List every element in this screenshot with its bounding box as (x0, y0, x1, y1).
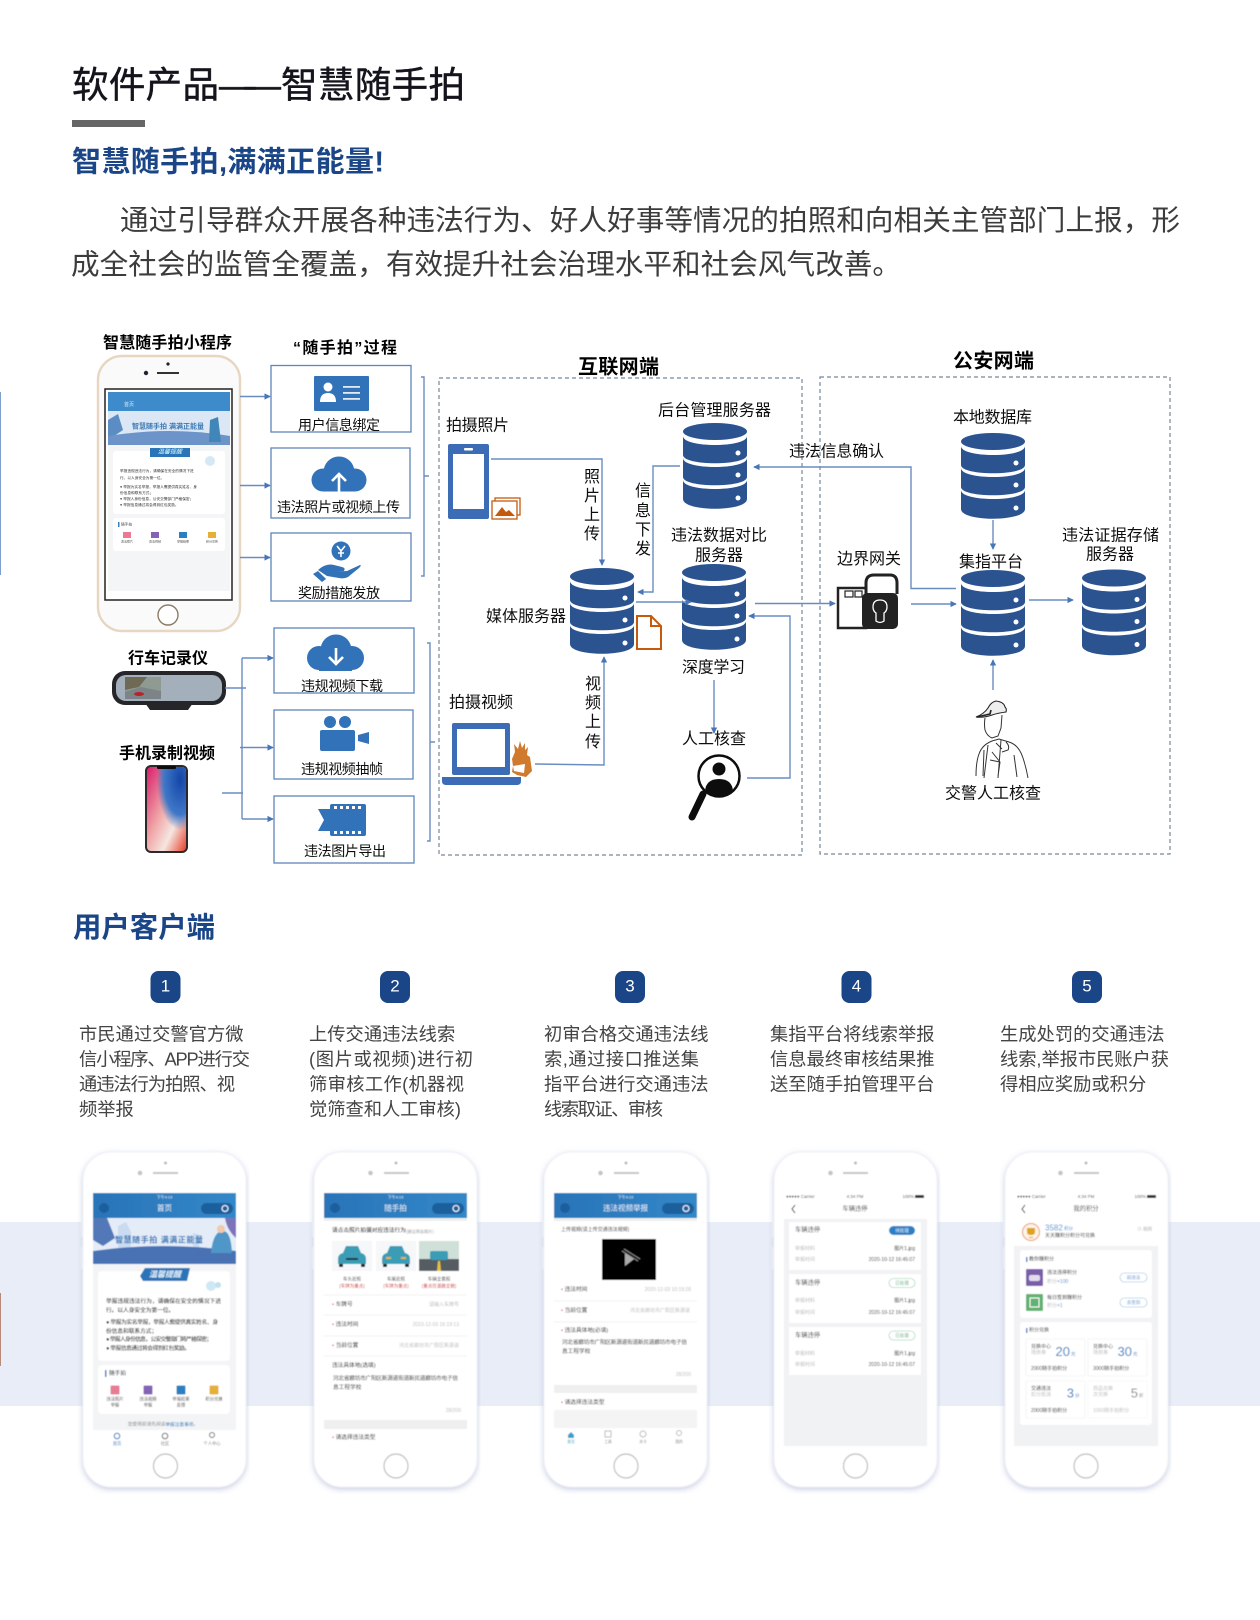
arrow: info dispatch: 息 (635, 502, 651, 520)
phone 5: points: ⊙ 规则 (1137, 1226, 1153, 1232)
gold phone with mini program: 份信息和联系方式； (120, 490, 153, 495)
step 1: 信小程序、APP进行交 (79, 1048, 250, 1070)
phone 1: home: 举报 (111, 1402, 120, 1408)
phone 5: points: 3000随手拍积分 (1093, 1365, 1129, 1372)
bracket: lower group (427, 643, 435, 841)
step 2: (图片或视频)进行初 (309, 1048, 473, 1070)
phone 3: report video: 我的 (675, 1439, 683, 1444)
phone 3: report video: • 违法时间 (561, 1285, 588, 1293)
phone 2: report photo: (车牌为重点) (383, 1282, 409, 1290)
phone 4: violation list: 车辆违停 (795, 1224, 820, 1234)
phone 1: home: 首页 (157, 1202, 172, 1212)
dash cam: 行车记录仪 (128, 648, 208, 668)
step 1: 1 (161, 976, 170, 996)
manual review (682, 730, 746, 817)
database: local (953, 408, 1032, 519)
database: backend server: 后台管理服务器 (658, 402, 771, 420)
phone 1: home: 举报违规违法行为，请确保在安全的情况下进 (106, 1297, 221, 1305)
step 4: 4 (852, 976, 861, 996)
step: frame extraction (274, 710, 413, 779)
phone 2: report photo (312, 1152, 477, 1487)
database: backend server (658, 402, 771, 509)
arrows: phone to steps (240, 396, 270, 558)
step 5 (1000, 971, 1169, 1094)
arrow: violation confirmation: 违法信息确认 (789, 442, 884, 460)
phone 5: points: 分 (1075, 1392, 1080, 1399)
phone 4: violation list: 图片1.jpg (894, 1350, 915, 1357)
phone 1: home: 行。以人身安全为第一位。 (106, 1306, 174, 1314)
phone 5: points (1003, 1152, 1168, 1487)
icon: document (637, 616, 661, 649)
phone 5: points: 场房券 (1031, 1349, 1046, 1356)
phone 4: violation list: 2020-10-12 16:45:07 (869, 1257, 915, 1263)
gold phone with mini program: 温馨提醒 (158, 448, 183, 456)
phone 4: violation list: 待处理 (895, 1227, 909, 1234)
phone 5: points: 前违法 (1127, 1274, 1141, 1281)
intro paragraph (71, 205, 1180, 281)
gold phone with mini program: ● 举报人身份信息，公安交警部门严格保密； (120, 496, 193, 501)
phone 3: report video: 上传视频(请上传交通违法视频) (561, 1226, 630, 1233)
step: reward (271, 533, 411, 601)
step 3: 索,通过接口推送集 (544, 1048, 699, 1070)
arrow: local to platform (992, 520, 994, 549)
phone 5: points: 元 (1071, 1352, 1076, 1358)
database: compare server: 违法数据对比 (671, 526, 767, 544)
phone 2: report photo: (车牌为重点) (339, 1282, 365, 1290)
gold phone with mini program: 举报结果 (177, 538, 189, 544)
phone 5: points: 次兑换 (1093, 1391, 1108, 1398)
capture video: 拍摄视频 (449, 694, 513, 712)
phone 1: home: 积分兑换 (205, 1396, 223, 1402)
phone 5: points: 兑换中心 (1093, 1343, 1113, 1350)
phone 4: violation list: 举报材料 (795, 1245, 815, 1252)
phone 4: violation list: 已处理 (895, 1332, 909, 1339)
left edge sliver (0, 392, 1, 1366)
database: platform: 集指平台 (959, 553, 1023, 571)
dash cam (112, 648, 226, 710)
heading: user client: 用户客户端 (73, 912, 215, 944)
arrow: photo upload: 传 (584, 524, 600, 542)
gold phone with mini program: 智慧随手拍 满满正能量 (132, 422, 204, 430)
phone 2: report photo: 河北省廊坊市广阳区新源道街道新民道廊坊市电子信 (333, 1374, 458, 1382)
phone 2: report photo: 请输入车牌号 (429, 1301, 459, 1308)
phone 5: points: ●●●●● Carrier (1017, 1194, 1046, 1199)
phone 5: points: 100% (1134, 1194, 1146, 1199)
arrow: photo upload (491, 459, 602, 565)
step: frame extraction: 违规视频抽帧 (301, 761, 383, 777)
gold phone with mini program: 违法照片 (121, 538, 133, 544)
gold phone with mini program: 违法视频 (149, 538, 161, 544)
gold phone with mini program: 举报违规违法行为，请确保在安全的情况下进 (120, 468, 194, 473)
phone 4: violation list: 已处理 (895, 1280, 909, 1286)
phone 2: report photo: 违法具体地(选填) (332, 1361, 376, 1369)
phone 1: home (81, 1152, 246, 1487)
step 2 (309, 971, 473, 1120)
phone 5: points: 折 (1139, 1392, 1144, 1399)
phone 1: home: 个人中心 (203, 1440, 221, 1447)
gateway (837, 550, 901, 629)
database: compare server (671, 526, 767, 650)
phone 5: points: 20 (1056, 1344, 1070, 1359)
phone 3: report video: 28/200 (676, 1372, 691, 1378)
phone 4: violation list: 车辆违停 (842, 1204, 868, 1212)
database: compare server: 服务器 (695, 546, 743, 564)
phone 5: points: 场房券 (1093, 1349, 1108, 1356)
arrow: info dispatch: 发 (635, 540, 651, 558)
phone 5: points: 每日签到赚积分 (1047, 1294, 1082, 1301)
step 3: 3 (625, 976, 635, 996)
arrow: video upload: 视 (585, 674, 601, 692)
phone 1: home: 举报结果 (172, 1396, 190, 1402)
phone 5: points: 天天赚积分积分可兑换 (1045, 1232, 1095, 1239)
arrow: to manual review (713, 680, 715, 733)
step 2: 筛审核工作(机器视 (309, 1074, 464, 1094)
phone 2: report photo: 车头近照 (343, 1276, 361, 1282)
phone 5: points: 积分+100 (1047, 1278, 1068, 1285)
phone 5: points: 5 (1131, 1386, 1138, 1400)
arrow: info dispatch: 信 (635, 482, 651, 500)
heading: process: “随手拍”过程 (293, 338, 397, 357)
label: deep learning: 深度学习 (682, 658, 745, 676)
step 3: 线索取证、审核 (544, 1098, 663, 1120)
arrow: platform to evidence (1029, 599, 1073, 601)
phone 1: home: 社区 (161, 1440, 170, 1447)
database: evidence (1062, 526, 1159, 655)
arrow: gateway to platform (911, 603, 956, 605)
phone 1: home: 份信息和联系方式； (106, 1327, 157, 1335)
arrow: photo upload: 照 (584, 468, 600, 486)
phone 2: report photo: 随手拍 (384, 1202, 407, 1212)
heading: mini program: 智慧随手拍小程序 (103, 333, 232, 352)
phone 1: home: 智慧随手拍 满满正能量 (115, 1234, 203, 1244)
phone 5: points: 我的积分 (1073, 1204, 1099, 1212)
phone 4: violation list (772, 1152, 937, 1487)
capture photo (446, 416, 520, 519)
phone 2: report photo: • 请选择违法类型 (332, 1433, 376, 1441)
database: evidence: 违法证据存储 (1062, 526, 1159, 544)
phone 5: points: 3582 积分 (1045, 1224, 1074, 1232)
phone 2: report photo: 下午4:19 (388, 1194, 404, 1200)
phone 3: report video: 违法视频举报 (603, 1202, 648, 1212)
phone 1: home: 随手拍 (109, 1369, 126, 1377)
phone 2: report photo: • 当前位置 (332, 1341, 359, 1349)
arrow: media to compare (636, 601, 691, 603)
step 5: 生成处罚的交通违法 (1000, 1024, 1165, 1044)
phone 3: report video: 关卡 (639, 1439, 647, 1444)
background band behind phones (0, 1222, 1260, 1406)
phone 4: violation list: 举报时间 (795, 1361, 815, 1368)
phone 4: violation list: 图片1.jpg (894, 1297, 915, 1304)
gold phone with mini program: ● 举报信息通过将会得到红包奖励。 (120, 502, 179, 507)
phone 1: home: 举报 (144, 1402, 153, 1408)
phone 1: home: ● 举报信息通过将会得到红包奖励。 (106, 1344, 190, 1352)
phone 2: report photo: 车尾近照 (387, 1276, 405, 1282)
phone video (119, 744, 215, 853)
step 3: 初审合格交通违法线 (544, 1024, 709, 1044)
database: media server: 媒体服务器 (486, 608, 566, 626)
gateway: 边界网关 (837, 550, 901, 568)
step: upload: 违法照片或视频上传 (277, 499, 400, 515)
gold phone with mini program: ● 举报为实名举报，举报人需提供真实姓名、身 (120, 484, 197, 489)
database: local: 本地数据库 (953, 408, 1032, 426)
phone 4: violation list: 图片1.jpg (894, 1245, 915, 1252)
database: platform (959, 553, 1025, 656)
intro paragraph: 成全社会的监管全覆盖，有效提升社会治理水平和社会风气改善。 (71, 249, 901, 281)
phone 5: points: 教你赚积分 (1029, 1256, 1054, 1262)
phone 2: report photo: (重点在道路全貌) (422, 1282, 457, 1290)
phone 5: points: 交通违法 (1031, 1385, 1051, 1392)
phone 5: points: 2000随手拍积分 (1031, 1365, 1067, 1372)
phone 4: violation list: 2020-10-12 16:45:07 (869, 1310, 915, 1316)
phone 1: home: 首页 (113, 1440, 122, 1447)
step 1: 通违法行为拍照、视 (79, 1074, 235, 1094)
phone 4: violation list: 举报时间 (795, 1256, 815, 1263)
phone 3: report video: 工具 (604, 1439, 612, 1444)
arrow: video upload (535, 657, 604, 765)
arrow: photo upload: 片 (584, 486, 600, 504)
step 1: 市民通过交警官方微 (79, 1024, 244, 1044)
arrow: video upload: 频 (585, 694, 601, 712)
phone 5: points: 商品兑换 (1093, 1385, 1113, 1392)
step: video download (274, 628, 414, 694)
arrow: violation confirmation (754, 442, 956, 588)
phone 5: points: 兑换中心 (1031, 1343, 1051, 1350)
arrow: photo upload: 上 (584, 506, 600, 524)
panel: internet side (439, 378, 802, 855)
step 3: 指平台进行交通违法 (544, 1074, 709, 1094)
phone 3: report video: 息工程学校 (562, 1347, 591, 1355)
step: image export: 违法图片导出 (304, 843, 386, 859)
step: upload (271, 448, 410, 518)
gold phone with mini program: 首页 (124, 401, 134, 408)
gold phone with mini program: 行。以人身安全为第一位。 (120, 475, 164, 480)
heading: police side: 公安网端 (953, 350, 1034, 372)
step 1: 频举报 (79, 1098, 134, 1120)
phone 1: home: 违法视频 (139, 1396, 157, 1402)
phone 2: report photo: 车辆全景照 (428, 1276, 451, 1282)
arrow: review back to compare (747, 616, 790, 778)
phone 1: home: ● 举报人身份信息，公安交警部门将严格保密； (106, 1335, 212, 1343)
title underline (72, 120, 145, 127)
phone 4: violation list: 举报材料 (795, 1350, 815, 1357)
database: evidence: 服务器 (1086, 546, 1134, 564)
subtitle: 智慧随手拍,满满正能量! (72, 146, 384, 178)
capture photo: 拍摄照片 (446, 416, 509, 434)
title: 软件产品 (72, 64, 219, 106)
phone 1: home: 您使用前请先阅读举报注意事项。 (128, 1420, 198, 1428)
phone 5: points: 扣分抵消 (1031, 1391, 1051, 1398)
traffic police (976, 701, 1028, 778)
step 5: 5 (1082, 976, 1092, 996)
arrow: video upload: 传 (585, 732, 601, 750)
phone 4: violation list: 举报材料 (795, 1297, 815, 1304)
phone 1: home: 温馨提醒 (149, 1270, 183, 1279)
phone 2: report photo: 2023-12-03 16:19:13 (413, 1322, 459, 1328)
phone 1: home: ● 举报为实名举报，举报人需提供真实姓名、身 (106, 1318, 218, 1326)
phone 3: report video: 首页 (567, 1439, 575, 1444)
database: media server (486, 568, 634, 654)
arrow: video upload: 上 (585, 712, 601, 730)
phone 5: points: 1000随手拍积分 (1093, 1407, 1129, 1414)
phone 5: points: 积分兑换 (1029, 1326, 1049, 1334)
phone 3: report video: 下午4:19 (618, 1194, 634, 1200)
phone 1: home: 下午4:19 (157, 1194, 173, 1200)
phone 4: violation list: ●●●●● Carrier (786, 1194, 815, 1199)
step 3 (544, 971, 709, 1120)
label: traffic police review: 交警人工核查 (945, 784, 1041, 802)
step 4: 送至随手拍管理平台 (770, 1074, 935, 1094)
step 2: 2 (390, 976, 400, 996)
phone video: 手机录制视频 (119, 744, 215, 762)
arrow: compare to gateway (755, 602, 835, 604)
step 5: 线索,举报市民账户获 (1000, 1048, 1169, 1070)
phone 2: report photo: 河北省廊坊市广阳区新源道 (399, 1342, 459, 1349)
step 1 (79, 971, 250, 1120)
gold phone with mini program: 积分兑换 (206, 538, 218, 544)
heading: internet side: 互联网端 (578, 356, 659, 378)
step: reward: 奖励措施发放 (298, 585, 380, 601)
phone 4: violation list: 举报时间 (795, 1309, 815, 1316)
phone 3: report video (542, 1152, 707, 1487)
step 5: 得相应奖励或积分 (1000, 1074, 1146, 1094)
arrow: info dispatch (635, 466, 680, 592)
phone 5: points: 去签到 (1127, 1299, 1141, 1306)
step: user binding (271, 366, 411, 433)
title: —— (219, 64, 282, 106)
phone 4: violation list: 100% (902, 1194, 914, 1199)
phone 2: report photo: 28/200 (446, 1408, 461, 1414)
phone 1: home: 违法照片 (106, 1396, 124, 1402)
arrows: sources to steps (222, 658, 273, 819)
title (72, 64, 465, 106)
gold phone with mini program: 随手拍 (121, 522, 132, 526)
phone 4: violation list: 2020-10-12 16:45:07 (869, 1362, 915, 1368)
bracket: upper group (421, 377, 429, 576)
gold phone with mini program (98, 356, 240, 631)
step 4 (770, 971, 935, 1094)
phone 2: report photo: 请点击照片拍摄对应违法行为(建议两张照片) (332, 1226, 434, 1234)
title: 智慧随手拍 (281, 64, 465, 106)
phone 5: points: 4:34 PM (1078, 1194, 1095, 1199)
step 4: 信息最终审核结果推 (770, 1048, 935, 1070)
phone 5: points: 积分+1 (1047, 1302, 1063, 1309)
phone 1: home: 反馈 (177, 1402, 186, 1408)
phone 5: points: 3 (1067, 1386, 1074, 1400)
capture video (442, 694, 532, 785)
phone 5: points: 元 (1133, 1352, 1138, 1358)
intro paragraph: 通过引导群众开展各种违法行为、好人好事等情况的拍照和向相关主管部门上报，形 (120, 205, 1180, 237)
phone 3: report video: • 请选择违法类型 (561, 1398, 605, 1406)
phone 3: report video: 河北省廊坊市广阳区新源道街道新民道廊坊市电子信 (562, 1338, 687, 1346)
panel: police side (820, 377, 1170, 854)
phone 3: report video: 河北省廊坊市广阳区新源道 (630, 1307, 690, 1314)
phone 4: violation list: 4:34 PM (847, 1194, 864, 1199)
step 2: 觉筛查和人工审核) (309, 1098, 461, 1120)
phone 4: violation list: 车辆违停 (795, 1278, 820, 1286)
architecture diagram (98, 333, 1170, 863)
phone 5: points: 违法违停积分 (1047, 1269, 1077, 1276)
step 2: 上传交通违法线索 (309, 1024, 455, 1044)
phone 5: points: 2000随手拍积分 (1031, 1407, 1067, 1414)
step: image export (274, 796, 414, 863)
arrow: info dispatch: 下 (635, 522, 651, 538)
arrow: officer to platform (992, 660, 994, 690)
manual review: 人工核查 (682, 730, 746, 748)
phone 3: report video: • 违法具体地(必填) (561, 1326, 608, 1334)
phone 2: report photo: 息工程学校 (333, 1383, 362, 1391)
phone 2: report photo: • 违法时间 (332, 1320, 359, 1328)
phone 2: report photo: • 车牌号 (332, 1300, 353, 1308)
step: user binding: 用户信息绑定 (298, 417, 380, 433)
step 4: 集指平台将线索举报 (770, 1024, 935, 1044)
step: video download: 违规视频下载 (301, 678, 383, 694)
phone 4: violation list: 车辆违停 (795, 1330, 820, 1339)
phone 3: report video: • 当前位置 (561, 1306, 588, 1314)
phone 3: report video: 2020-12-03 10:19:28 (645, 1287, 691, 1293)
phone 5: points: 30 (1118, 1344, 1132, 1359)
